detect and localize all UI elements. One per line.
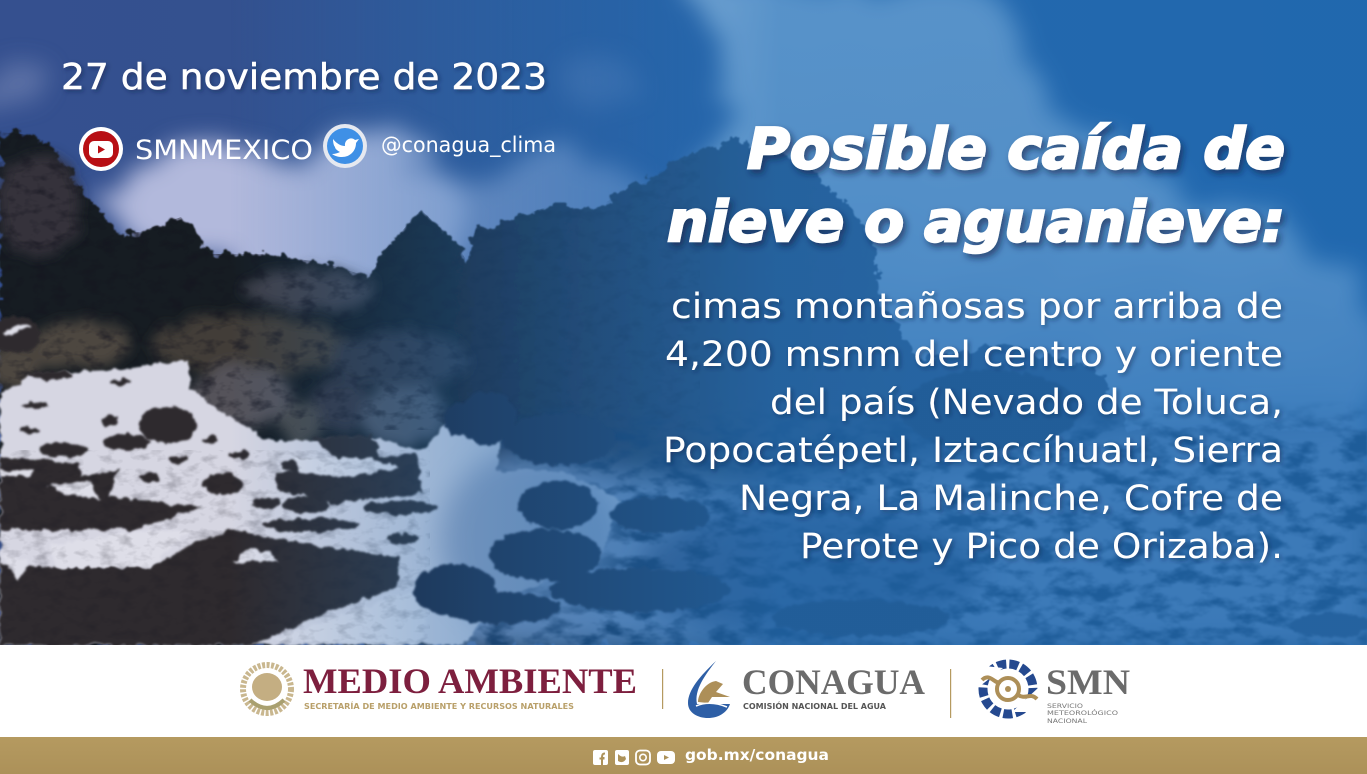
body text: affected summits: 4,200 msnm del centro y oriente xyxy=(665,335,1283,375)
body text: affected summits xyxy=(663,287,1283,567)
body text: affected summits: cimas montañosas por arriba de xyxy=(671,287,1283,327)
main title: Posible caída de xyxy=(747,117,1285,182)
footer URL: gob.mx/conagua xyxy=(685,746,829,764)
body text: affected summits: Negra, La Malinche, Cofre de xyxy=(739,479,1283,519)
icon: national shield xyxy=(243,665,291,713)
icon: Conagua drop xyxy=(688,661,730,718)
logo: Medio Ambiente: SECRETARÍA DE MEDIO AMBIENTE Y RECURSOS NATURALES xyxy=(304,702,574,711)
icon: YouTube xyxy=(79,127,123,171)
icon: Facebook xyxy=(593,750,608,765)
blue speckled snow on right xyxy=(430,415,1367,645)
YouTube channel name: SMNMEXICO xyxy=(135,135,313,166)
grain over rocks xyxy=(0,450,430,645)
blue-toned rocks in centre xyxy=(413,370,1367,637)
snow caps on rocks xyxy=(0,324,430,645)
grain on vegetation and hill xyxy=(0,132,610,430)
clouds left xyxy=(0,61,660,295)
divider xyxy=(950,669,951,718)
Twitter handle: @conagua_clima xyxy=(381,133,556,158)
body text: affected summits: Popocatépetl, Iztaccíhuatl, Sierra xyxy=(663,431,1283,471)
main title: nieve o aguanieve: xyxy=(667,190,1285,255)
white logo band xyxy=(0,645,1367,737)
icon: Twitter xyxy=(615,750,629,765)
logo: SMN: SMN xyxy=(1046,662,1130,702)
body text: affected summits: Perote y Pico de Orizaba). xyxy=(800,527,1283,567)
snow field xyxy=(0,361,620,645)
icon: SMN spiral xyxy=(973,655,1045,723)
clouds right xyxy=(640,0,1367,450)
icon: Instagram xyxy=(636,750,650,764)
logo: Conagua: COMISIÓN NACIONAL DEL AGUA xyxy=(743,702,886,711)
logo: SMN: METEOROLÓGICO xyxy=(1047,708,1118,717)
logo: Conagua xyxy=(688,661,925,718)
date heading: 27 de noviembre de 2023 xyxy=(61,57,547,98)
logo: Medio Ambiente: MEDIO AMBIENTE xyxy=(303,661,637,701)
icon: YouTube xyxy=(657,751,675,764)
darker shading on snow toward the right xyxy=(440,450,620,630)
main title xyxy=(667,117,1285,255)
logo: Medio Ambiente xyxy=(243,661,637,713)
logo: SMN xyxy=(973,655,1130,725)
divider xyxy=(662,669,663,709)
grey rock face on the hill xyxy=(0,155,375,310)
logo: SMN: SERVICIO xyxy=(1047,702,1083,710)
logo: SMN: NACIONAL xyxy=(1047,717,1087,725)
logo: Conagua: CONAGUA xyxy=(742,662,925,702)
gold footer bar xyxy=(0,737,1367,774)
rocky hill left and forest silhouette xyxy=(0,127,1142,645)
icon: Twitter xyxy=(323,124,367,168)
dry grass xyxy=(0,315,470,447)
body text: affected summits: del país (Nevado de Toluca, xyxy=(770,383,1283,423)
footer social icons xyxy=(593,750,675,765)
blue tint overlay xyxy=(257,0,1367,645)
social row: YouTube and Twitter handles xyxy=(79,124,556,171)
dark rocks on snow xyxy=(0,317,438,645)
